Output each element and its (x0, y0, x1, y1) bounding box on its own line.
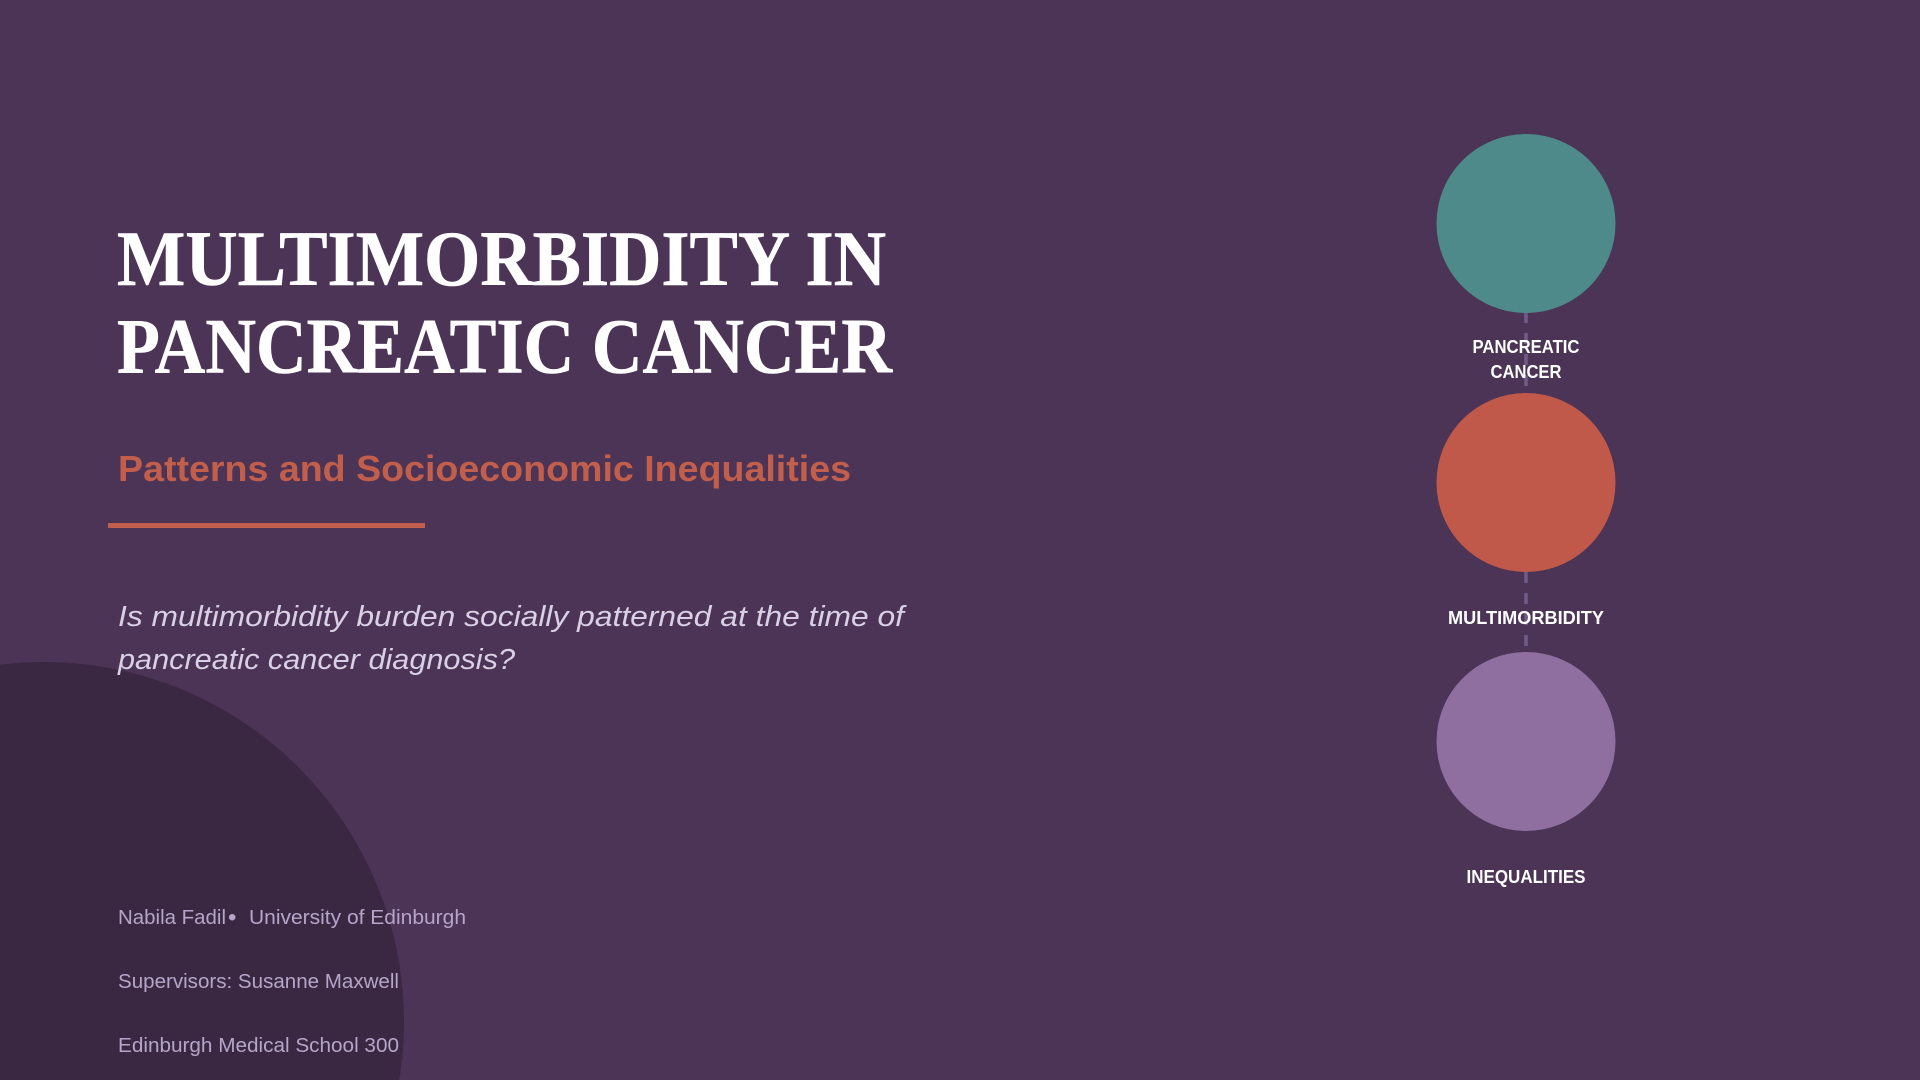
circle: inequalities (1436, 652, 1616, 831)
subtitle underline (108, 523, 425, 528)
author and affiliation details: • (228, 904, 236, 931)
author and affiliation details: Nabila Fadil (118, 906, 226, 929)
label: pancreatic cancer: PANCREATIC (1472, 337, 1580, 357)
author and affiliation details: Supervisors: Susanne Maxwell (118, 970, 399, 993)
label: multimorbidity: MULTIMORBIDITY (1448, 608, 1604, 628)
author and affiliation details: University of Edinburgh (249, 906, 466, 929)
research question (117, 601, 907, 676)
research question: Is multimorbidity burden socially patterned at the time of (118, 601, 907, 633)
circle: multimorbidity (1436, 393, 1616, 572)
connector: pancreatic cancer to multimorbidity (1524, 312, 1528, 388)
author and affiliation details (118, 904, 466, 1057)
label: pancreatic cancer (1472, 337, 1580, 382)
subtitle: Patterns and Socioeconomic Inequalities (118, 448, 851, 489)
title: MULTIMORBIDITY IN (117, 215, 886, 302)
label: inequalities: INEQUALITIES (1466, 867, 1586, 887)
label: pancreatic cancer: CANCER (1490, 362, 1562, 382)
decorative dark circle (0, 662, 404, 1080)
author and affiliation details: Edinburgh Medical School 300 (118, 1034, 399, 1057)
title: PANCREATIC CANCER (117, 302, 893, 390)
connector: multimorbidity to inequalities (1524, 572, 1528, 648)
circle: pancreatic cancer (1436, 134, 1616, 313)
research question: pancreatic cancer diagnosis? (117, 644, 516, 676)
title (117, 215, 893, 390)
